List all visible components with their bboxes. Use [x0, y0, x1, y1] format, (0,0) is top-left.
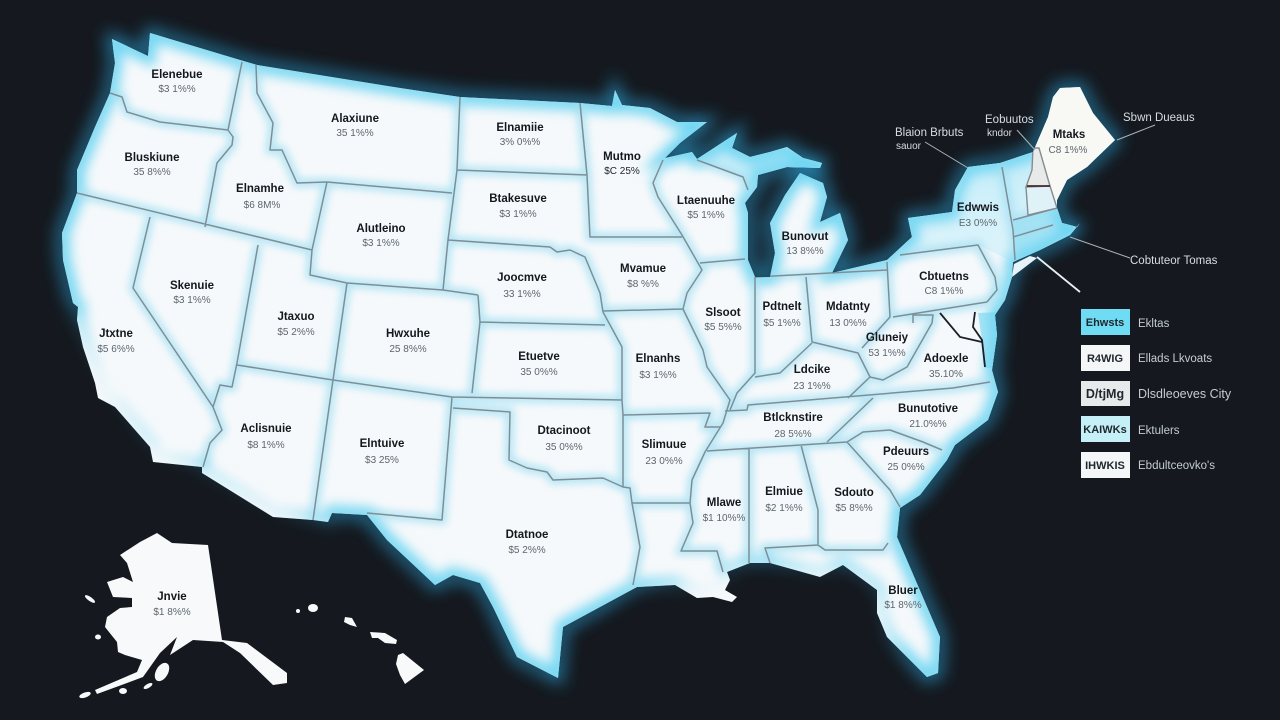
- label: Texas: $5 2%%: [508, 545, 546, 556]
- label: North Carolina: 21.0%%: [909, 419, 947, 430]
- label: Maine: Mtaks: [1053, 129, 1085, 141]
- label: Illinois: Slsoot: [705, 307, 741, 319]
- label: Georgia: Sdouto: [834, 487, 874, 499]
- label: Oklahoma: [537, 425, 591, 453]
- label: Michigan: Bunovut: [782, 231, 828, 243]
- label: Utah: [277, 311, 315, 338]
- label: Arizona: [240, 423, 292, 451]
- map fill: [62, 33, 1115, 678]
- label: Wyoming: $3 1%%: [362, 238, 400, 249]
- label: Kansas: 35 0%%: [520, 367, 558, 378]
- label: Tennessee: Btlcknstire: [763, 412, 823, 424]
- label: Nebraska: Joocmve: [497, 272, 547, 284]
- New York and New England tint: [900, 152, 1090, 262]
- label: West Virginia: [866, 332, 909, 359]
- label: New Mexico: $3 25%: [365, 455, 399, 466]
- label: Idaho: [236, 183, 284, 211]
- legend item 3: [1081, 381, 1232, 406]
- label: Idaho: Elnamhe: [236, 183, 284, 195]
- panel: Hawaii islands: [296, 604, 424, 684]
- label: North Dakota: [496, 122, 544, 148]
- label: North Carolina: [898, 403, 958, 430]
- callout: Maine coast: Sbwn Dueaus: [1123, 112, 1195, 124]
- callout: north-west New York: sauor: [896, 141, 922, 152]
- legend item 1: Ekltas: [1138, 318, 1170, 330]
- label: New Mexico: Elntuive: [360, 438, 404, 450]
- legend item 5: Ebdultceovko's: [1138, 460, 1215, 472]
- label: Kentucky: Ldcike: [794, 364, 830, 376]
- legend item 1: [1081, 309, 1170, 335]
- label: Utah: $5 2%%: [277, 327, 315, 338]
- label: New Mexico: [360, 438, 404, 466]
- label: Montana: 35 1%%: [336, 128, 374, 139]
- New Hampshire lower: [1026, 186, 1057, 215]
- label: South Carolina: 25 0%%: [887, 462, 925, 473]
- New Hampshire upper: [1026, 148, 1050, 187]
- callout: north-west New York: [895, 127, 968, 168]
- label: Tennessee: 28 5%%: [774, 429, 812, 440]
- label: West Virginia: 53 1%%: [868, 348, 906, 359]
- label: Arkansas: [642, 439, 686, 467]
- label: New York: [957, 202, 999, 229]
- label: Michigan: [782, 231, 828, 257]
- panel: contiguous US map: [62, 33, 1115, 678]
- label: Nebraska: [497, 272, 547, 300]
- legend item 3: D/tjMg: [1086, 387, 1124, 401]
- label: Virginia: 35.10%: [929, 369, 963, 380]
- Michigan upper peninsula tint: [697, 133, 822, 190]
- label: Illinois: $5 5%%: [704, 322, 742, 333]
- Maine: [1033, 87, 1115, 205]
- label: Ohio: [826, 301, 871, 329]
- label: Oregon: 35 8%%: [133, 167, 171, 178]
- state labels: [97, 69, 1088, 618]
- label: Maine: C8 1%%: [1049, 145, 1088, 156]
- Delmarva cyan: [978, 312, 997, 368]
- label: South Carolina: [883, 446, 929, 473]
- label: Mississippi: $1 10%%: [703, 513, 746, 524]
- label: North Carolina: Bunutotive: [898, 403, 958, 415]
- label: Pennsylvania: C8 1%%: [925, 286, 964, 297]
- label: Kansas: Etuetve: [518, 351, 560, 363]
- label: California: $5 6%%: [97, 344, 135, 355]
- label: Nevada: Skenuie: [170, 280, 214, 292]
- legend item 5: IHWKIS: [1085, 460, 1125, 472]
- label: Nevada: [170, 280, 214, 306]
- state borders: [77, 62, 1057, 585]
- callout: Maine coast: [1117, 112, 1195, 140]
- label: Alabama: [765, 486, 803, 514]
- label: Wisconsin: Ltaenuuhe: [677, 195, 735, 207]
- legend item 4: Ektulers: [1138, 425, 1180, 437]
- label: North Dakota: 3% 0%%: [500, 137, 540, 148]
- label: Kentucky: 23 1%%: [793, 381, 831, 392]
- callout: Vermont: [985, 114, 1035, 150]
- label: West Virginia: Gluneiy: [866, 332, 909, 344]
- label: Colorado: Hwxuhe: [386, 328, 430, 340]
- label: Oregon: Bluskiune: [125, 152, 179, 164]
- label: Alaska: Jnvie: [157, 591, 187, 603]
- New York harbour line: [1037, 257, 1080, 292]
- panel: Alaska: [95, 533, 287, 694]
- label: Arkansas: Slimuue: [642, 439, 686, 451]
- label: Ohio: Mdatnty: [826, 301, 871, 313]
- label: Colorado: [386, 328, 430, 355]
- label: Missouri: $3 1%%: [639, 370, 677, 381]
- Massachusetts cyan band: [1013, 208, 1080, 260]
- label: South Dakota: Btakesuve: [489, 193, 547, 205]
- callout: Massachusetts coast: [1070, 237, 1218, 267]
- legend item 2: [1081, 345, 1212, 371]
- callout: Vermont: Eobuutos: [985, 114, 1034, 126]
- map interior with tints, edge glow and borders: [62, 33, 1115, 678]
- label: Florida: Bluer: [888, 585, 918, 597]
- label: Arizona: Aclisnuie: [240, 423, 292, 435]
- label: Montana: [331, 113, 379, 139]
- label: Iowa: $8 %%: [627, 279, 659, 290]
- label: Montana: Alaxiune: [331, 113, 379, 125]
- label: Illinois: [704, 307, 742, 333]
- label: Florida: $1 8%%: [884, 600, 922, 611]
- label: Oregon: [125, 152, 179, 178]
- label: Indiana: Pdtnelt: [763, 301, 802, 313]
- label: Washington: Elenebue: [151, 69, 203, 81]
- callout: north-west New York: Blaion Brbuts: [895, 127, 964, 139]
- label: Oklahoma: Dtacinoot: [537, 425, 591, 437]
- label: California: Jtxtne: [99, 328, 133, 340]
- legend item 5: [1081, 452, 1215, 478]
- legend item 2: Ellads Lkvoats: [1138, 353, 1212, 365]
- label: New York: Edwwis: [957, 202, 999, 214]
- label: Minnesota: Mutmo: [603, 151, 641, 163]
- label: Colorado: 25 8%%: [389, 344, 427, 355]
- label: Kentucky: [793, 364, 831, 392]
- label: Arizona: $8 1%%: [247, 440, 285, 451]
- label: Mississippi: [703, 497, 746, 524]
- label: Ohio: 13 0%%: [829, 318, 867, 329]
- label: Virginia: Adoexle: [924, 353, 968, 365]
- label: California: [97, 328, 135, 355]
- legend: [1081, 309, 1232, 478]
- label: Mississippi: Mlawe: [707, 497, 741, 509]
- label: Georgia: $5 8%%: [835, 503, 873, 514]
- Long Island sliver: [1012, 256, 1037, 277]
- label: Nevada: $3 1%%: [173, 295, 211, 306]
- label: Texas: Dtatnoe: [506, 529, 548, 541]
- label: Washington: [151, 69, 203, 95]
- label: Wisconsin: $5 1%%: [687, 210, 725, 221]
- label: Oklahoma: 35 0%%: [545, 442, 583, 453]
- label: Washington: $3 1%%: [158, 84, 196, 95]
- label: Florida: [884, 585, 922, 611]
- label: Michigan: 13 8%%: [786, 246, 824, 257]
- label: Arkansas: 23 0%%: [645, 456, 683, 467]
- label: Texas: [506, 529, 548, 556]
- legend item 2: R4WIG: [1087, 353, 1123, 365]
- border glow: [77, 62, 1057, 585]
- legend item 4: KAIWKs: [1083, 424, 1127, 436]
- label: Iowa: [620, 263, 666, 290]
- label: Utah: Jtaxuo: [277, 311, 315, 323]
- label: Wisconsin: [677, 195, 735, 221]
- label: South Dakota: [489, 193, 547, 220]
- label: Wyoming: Alutleino: [356, 223, 406, 235]
- label: Indiana: [763, 301, 802, 329]
- label: Tennessee: [763, 412, 823, 440]
- label: Minnesota: $C 25%: [604, 166, 640, 177]
- label: North Dakota: Elnamiie: [496, 122, 544, 134]
- label: Indiana: $5 1%%: [763, 318, 801, 329]
- label: Iowa: Mvamue: [620, 263, 666, 275]
- label: Alaska: $1 8%%: [153, 607, 191, 618]
- callout: Massachusetts coast: Cobtuteor Tomas: [1130, 255, 1218, 267]
- label: South Dakota: $3 1%%: [499, 209, 537, 220]
- label: Missouri: Elnanhs: [636, 353, 680, 365]
- Chesapeake shoreline: [940, 312, 985, 367]
- inner edge glow: [62, 33, 1115, 678]
- callout: Vermont: kndor: [987, 128, 1013, 139]
- label: Georgia: [834, 487, 874, 514]
- label: South Carolina: Pdeuurs: [883, 446, 929, 458]
- divider between New Hampshire parts: [1027, 185, 1050, 187]
- label: Pennsylvania: Cbtuetns: [919, 271, 969, 283]
- label: Wyoming: [356, 223, 406, 249]
- label: Missouri: [636, 353, 680, 381]
- legend item 4: [1081, 416, 1180, 442]
- label: Maine: [1049, 129, 1088, 156]
- label: Alabama: $2 1%%: [765, 503, 803, 514]
- outer cyan glow: [62, 33, 1115, 678]
- legend item 1: Ehwsts: [1086, 317, 1124, 329]
- label: Kansas: [518, 351, 560, 378]
- legend item 3: Dlsdleoeves City: [1138, 387, 1232, 401]
- label: Alaska: [153, 591, 191, 618]
- Alaska islands: [79, 594, 172, 699]
- label: Idaho: $6 8M%: [244, 200, 280, 211]
- label: Minnesota: [603, 151, 641, 177]
- label: Alabama: Elmiue: [765, 486, 803, 498]
- label: Pennsylvania: [919, 271, 969, 297]
- label: New York: E3 0%%: [959, 218, 997, 229]
- label: Nebraska: 33 1%%: [503, 289, 541, 300]
- label: Virginia: [924, 353, 968, 380]
